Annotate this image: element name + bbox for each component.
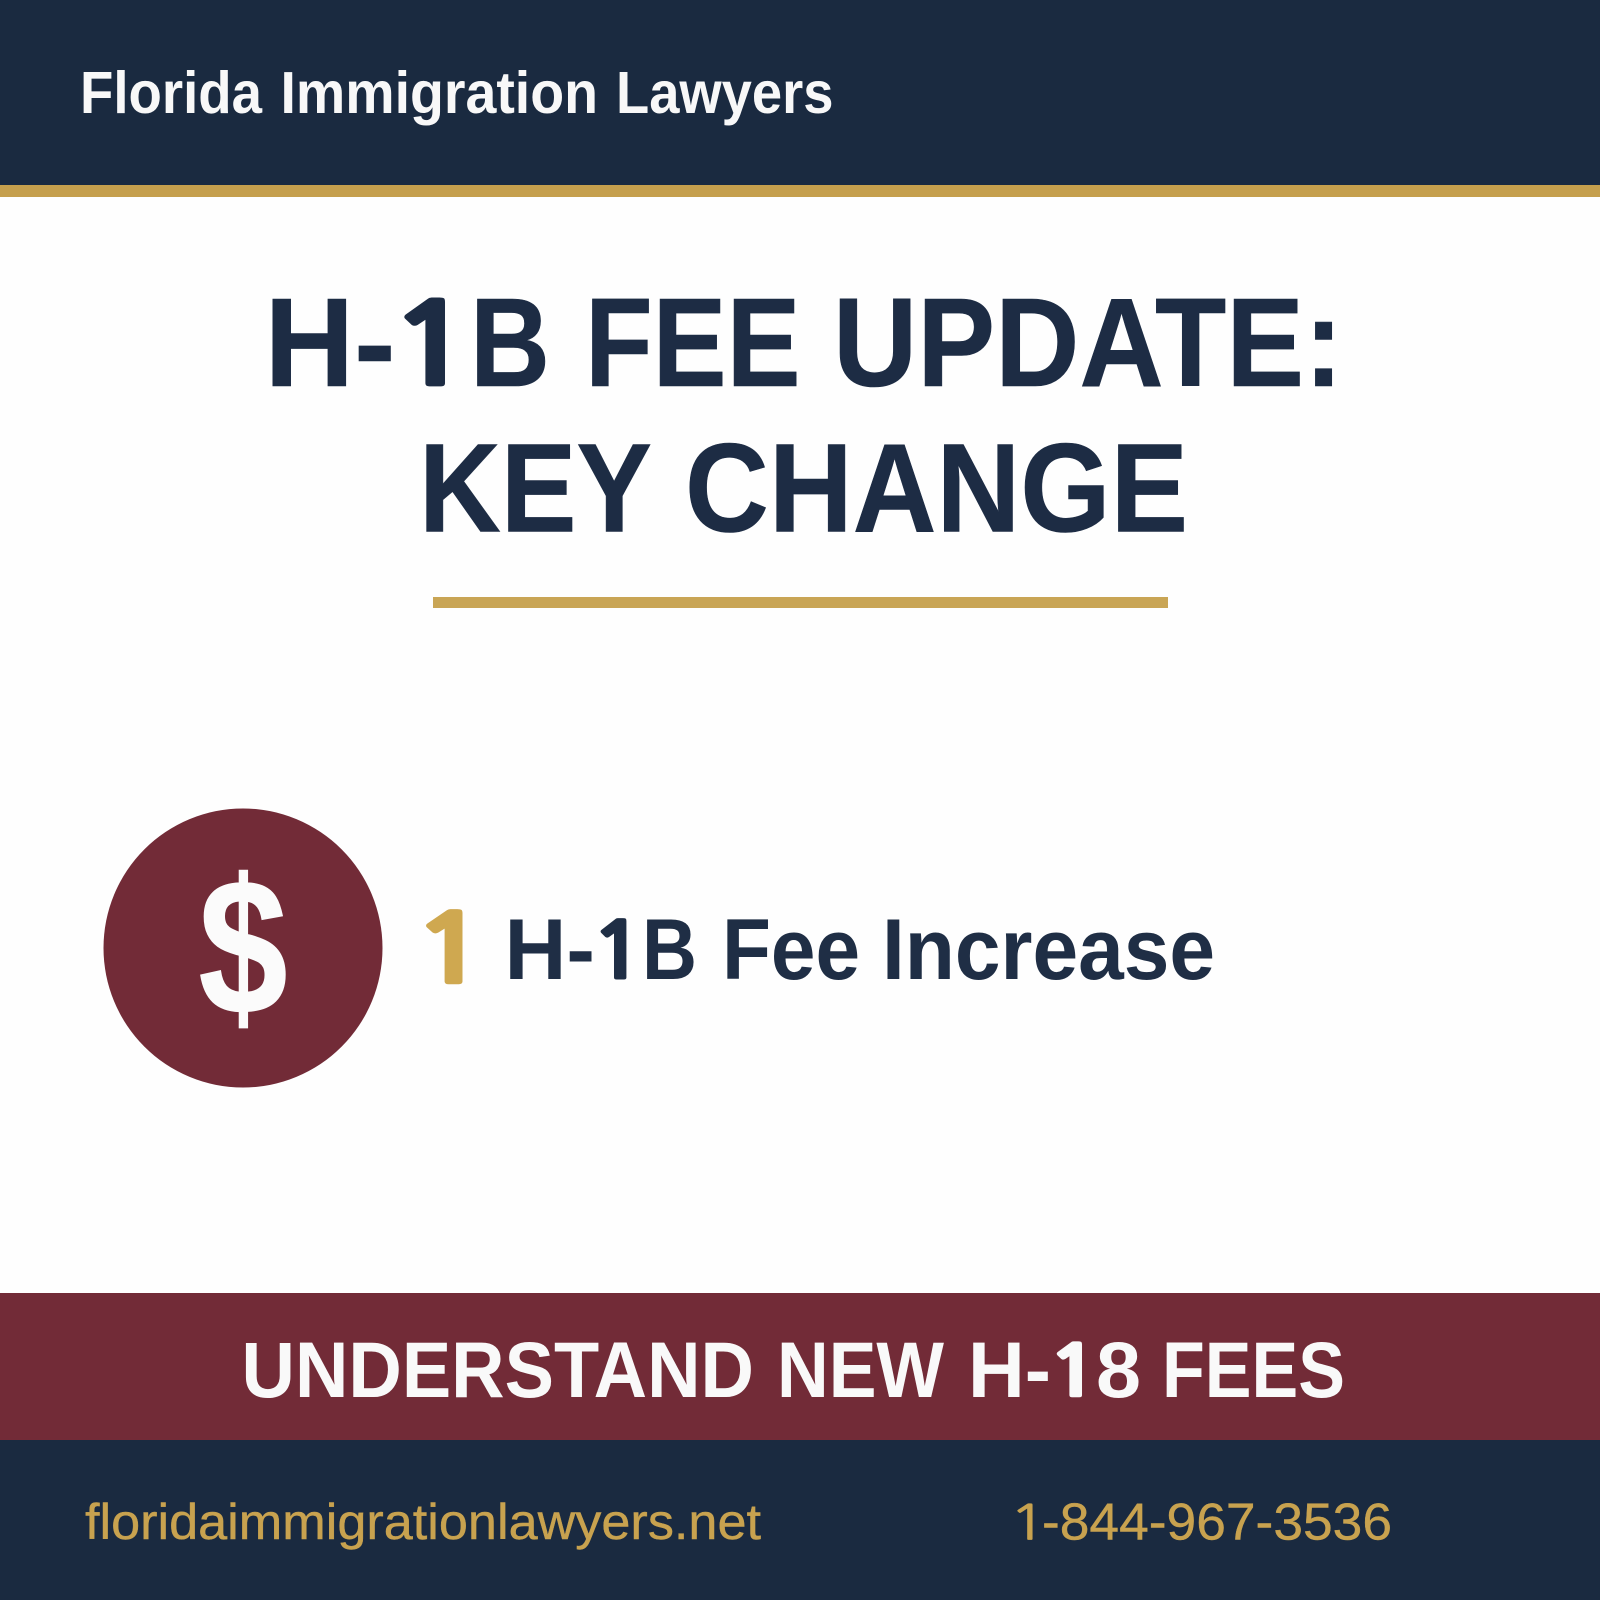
- phone: 1: [1009, 1499, 1047, 1547]
- icon: dollar coin: $: [198, 838, 288, 1055]
- title: B: [470, 272, 550, 413]
- title: H-: [264, 272, 396, 413]
- icon: dollar coin: [104, 808, 382, 1088]
- firm name: Immigration: [280, 60, 598, 126]
- call to action band: H-: [968, 1325, 1051, 1414]
- title: FEE: [585, 272, 800, 413]
- call to action band: UNDERSTAND: [242, 1325, 754, 1414]
- footer band: [0, 1440, 1600, 1600]
- firm name: Florida: [80, 60, 263, 126]
- website: floridaimmigrationlawyers.net: [85, 1494, 761, 1550]
- item label: 1: [590, 914, 646, 990]
- title: [264, 272, 1343, 558]
- title: CHANGE: [685, 418, 1188, 558]
- item label: B: [642, 902, 697, 998]
- item: H-1B fee increase: [104, 808, 1215, 1088]
- firm name: [80, 60, 834, 126]
- firm name: Lawyers: [616, 60, 834, 126]
- header band: [0, 0, 1600, 197]
- call to action band: NEW: [777, 1325, 944, 1414]
- call to action band: [0, 1293, 1600, 1440]
- phone: -844-967-3536: [1042, 1494, 1392, 1552]
- title: KEY: [419, 418, 652, 558]
- call to action band: 8: [1096, 1325, 1141, 1414]
- item label: Fee: [722, 902, 860, 998]
- title: UPDATE:: [833, 272, 1343, 413]
- call to action band: 1: [1047, 1337, 1100, 1407]
- item number: 1: [412, 903, 490, 997]
- item label: Increase: [882, 902, 1215, 998]
- call to action band: FEES: [1162, 1325, 1345, 1414]
- title: 1: [387, 290, 476, 402]
- item label: H-: [504, 902, 595, 998]
- title underline: [433, 597, 1168, 608]
- item label: [504, 902, 1215, 998]
